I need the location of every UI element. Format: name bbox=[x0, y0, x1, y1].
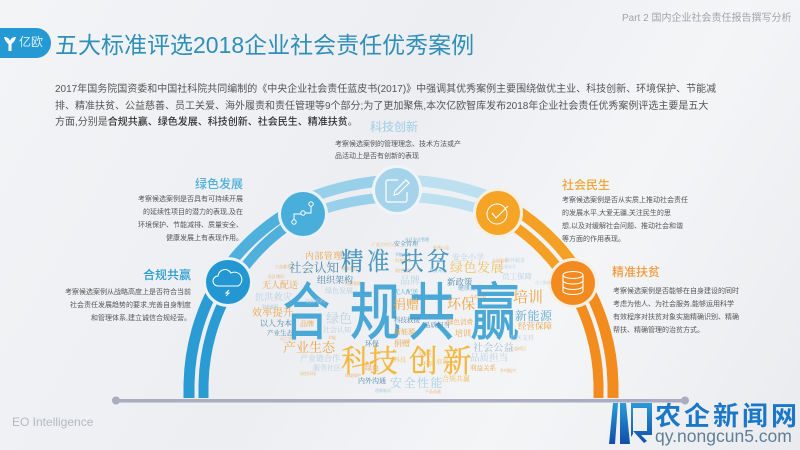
small dark blue words: 科技救援 bbox=[394, 315, 420, 324]
small light words bbox=[255, 252, 534, 373]
small dark blue words bbox=[260, 239, 473, 386]
tiny filler words: 社区安全管理 bbox=[405, 236, 429, 243]
small dark blue words: 以人为本 bbox=[260, 318, 292, 329]
heading: 精准扶贫 bbox=[612, 265, 660, 279]
words: 精准扶贫: 扶 bbox=[401, 242, 424, 277]
logo name: 亿欧 bbox=[19, 35, 43, 49]
small orange words: 效率提升 bbox=[252, 304, 293, 319]
small dark blue words: 组织架构 bbox=[317, 273, 353, 286]
description: 的延续性项目的潜力的表现,及在 bbox=[143, 209, 243, 216]
tiny filler words: 社区建设 bbox=[268, 273, 284, 280]
heading: 合规共赢 bbox=[143, 268, 191, 282]
description: 等方面的作用表现。 bbox=[562, 236, 625, 243]
words: 精准扶贫 bbox=[341, 242, 449, 277]
large words: 合规共赢 bbox=[283, 262, 519, 353]
arch segment: orange base bbox=[570, 278, 613, 398]
words: 科技创新: 创 bbox=[409, 337, 438, 381]
panel: 精准扶贫 bbox=[612, 265, 739, 334]
small light words: 社会认知 bbox=[323, 325, 351, 335]
description bbox=[335, 140, 461, 160]
tiny filler words: 扶贫开发 bbox=[430, 267, 446, 274]
small light words: 资源节约 bbox=[305, 298, 325, 305]
tiny filler words: 创新驱动 bbox=[375, 387, 391, 394]
tiny filler words: 内部管理 bbox=[345, 280, 361, 287]
description: 帮扶、精确管理的治贫方式。 bbox=[613, 327, 704, 334]
small blue words: 健康提升 bbox=[458, 283, 482, 292]
tiny filler words: 质量安全 bbox=[500, 263, 516, 270]
word cloud bbox=[252, 236, 553, 395]
description bbox=[562, 196, 688, 243]
small dark blue words: 安全管理 bbox=[394, 239, 418, 248]
small light words: 绿色 bbox=[326, 308, 352, 327]
small orange words: 培训 bbox=[513, 286, 543, 307]
small dark blue words: 新政策 bbox=[447, 276, 473, 288]
description: 品活动上是否有创新的表现 bbox=[335, 153, 419, 160]
small blue words: 安全性能 bbox=[390, 374, 444, 391]
arch segment: blue base bbox=[189, 278, 232, 398]
small blue words: 新能源 bbox=[515, 307, 553, 324]
small dark blue words: 内外沟通 bbox=[358, 376, 386, 386]
small light words: 员工保障 bbox=[502, 271, 532, 282]
intro paragraph: 方面,分别是合规共赢、绿色发展、科技创新、社会民生、精准扶贫。 bbox=[55, 117, 358, 128]
tiny filler words: 志愿服务 bbox=[492, 257, 508, 264]
words: 精准扶贫: 精 bbox=[341, 242, 363, 277]
watermark logo bbox=[609, 401, 800, 446]
tiny filler words: 绿色环保 bbox=[300, 370, 316, 377]
small light words: 品质担当 bbox=[470, 350, 508, 364]
words: 科技创新 bbox=[341, 337, 472, 381]
small orange words: 产业生态 bbox=[283, 337, 336, 356]
small orange words: 无人配送 bbox=[262, 278, 298, 291]
description: 考察候选案例是否具有可持续开展 bbox=[138, 196, 243, 203]
small orange words: 内部管理 bbox=[305, 249, 343, 262]
tiny filler words: 海外履责 bbox=[262, 303, 279, 310]
tiny filler words: 精准帮扶 bbox=[342, 265, 358, 272]
description: 考察候选案例是否从实质上推动社会责任 bbox=[562, 197, 688, 204]
small blue words: 无人配送 bbox=[394, 287, 418, 296]
icon: network node bbox=[278, 189, 328, 239]
small light words: 抗洪救灾 bbox=[255, 290, 292, 303]
small orange words: 品牌 bbox=[300, 319, 314, 329]
large words: 合规共赢: 合 bbox=[283, 262, 330, 352]
panel: 合规共赢 bbox=[65, 268, 191, 322]
watermark name: 农企新闻网 bbox=[655, 401, 800, 431]
tiny filler words: 慈善公益 bbox=[433, 244, 449, 251]
title: 五大标准评选2018企业社会责任优秀案例 bbox=[55, 32, 474, 58]
tiny filler words bbox=[262, 236, 551, 395]
logo badge bbox=[0, 28, 51, 58]
heading: 绿色发展 bbox=[195, 177, 243, 191]
words: 科技创新: 新 bbox=[443, 337, 472, 381]
large words: 合规共赢: 共 bbox=[408, 262, 455, 352]
small dark blue words: 社会认知 bbox=[289, 258, 339, 276]
small orange words: 环保 bbox=[447, 294, 475, 314]
tiny filler words: 科普教育 bbox=[395, 257, 411, 264]
small orange words: 新能源 bbox=[394, 327, 416, 337]
large words: 合规共赢: 赢 bbox=[470, 263, 519, 353]
tiny filler words: 节能减排 bbox=[395, 251, 411, 258]
description: 考察候选案例是否能够在自身建设的同时 bbox=[613, 288, 739, 295]
small orange words: 绿色消费 bbox=[447, 317, 474, 326]
icon: cloud node bbox=[203, 257, 253, 307]
intro paragraph: 2017年国务院国资委和中国社科院共同编制的《中央企业社会责任蓝皮书(2017)》中强调其优秀案例主要围绕做优主业、科技创新、环境保护、节能减 bbox=[55, 84, 716, 95]
tiny filler words: 公益项目 bbox=[510, 345, 526, 352]
small light words: 服务社区 bbox=[313, 363, 341, 373]
words: 科技创新: 科 bbox=[341, 337, 370, 381]
small orange words: 捐赠 bbox=[393, 294, 419, 313]
heading: 社会民生 bbox=[562, 178, 610, 192]
arch segment: amber bbox=[497, 203, 582, 285]
panel: 绿色发展 bbox=[138, 177, 243, 242]
small gold words: 环保 bbox=[421, 359, 433, 368]
small light words: 品牌 bbox=[400, 272, 420, 287]
tiny filler words: 责任管理 bbox=[395, 267, 411, 274]
small orange words: 经营保障 bbox=[518, 320, 553, 332]
icon: database node bbox=[548, 258, 598, 308]
intro paragraph: 排、精准扶贫、公益慈善、员工关爱、海外履责和责任管理等9个部分;为了更加聚焦,本次亿欧智库发布2018年企业社会责任优秀案例评选主要是五大 bbox=[55, 100, 708, 112]
tiny filler words: 产品质量 bbox=[425, 388, 441, 395]
words: 科技创新: 技 bbox=[369, 337, 398, 381]
arch segment: light blue bbox=[295, 180, 397, 217]
small orange words bbox=[252, 249, 553, 373]
icon: pencil note node bbox=[372, 165, 422, 215]
description: 考察候选案例的管理理念、技术方法或产 bbox=[335, 141, 461, 148]
tiny filler words: 产品创新 bbox=[470, 293, 486, 300]
tiny filler words: 员工健康 bbox=[535, 279, 551, 286]
small dark blue words: 品质担当 bbox=[424, 320, 450, 329]
small light words: 社会公益 bbox=[473, 339, 514, 354]
small gold words: 绿色发展 bbox=[450, 257, 504, 276]
header section label: Part 2 国内企业社会责任报告撰写分析 bbox=[622, 13, 791, 24]
description: 环境保护、节能减排、质量安全、 bbox=[138, 222, 243, 229]
small gold words: 合规共赢 bbox=[442, 374, 470, 384]
tiny filler words: 社会责任 bbox=[300, 301, 316, 308]
small orange words: 绿色 bbox=[365, 363, 379, 373]
small dark blue words: 产业生态 bbox=[267, 328, 294, 337]
small light words: 产业链合作 bbox=[300, 353, 340, 364]
arch segment: mid blue bbox=[220, 204, 303, 285]
tiny filler words: 环境保护 bbox=[345, 372, 361, 379]
description: 有效程序对扶贫对象实施精确识别、精确 bbox=[613, 314, 739, 321]
icon: check node bbox=[473, 188, 523, 238]
small light words: 海外履责 bbox=[505, 257, 526, 264]
description: 的发展水平,大爱无疆,关注民生的思 bbox=[562, 210, 671, 217]
words: 精准扶贫: 贫 bbox=[427, 242, 449, 277]
small light words: 绿色发展 bbox=[325, 286, 353, 296]
description: 和管理体系,建立诚信合规经营。 bbox=[91, 315, 191, 322]
small gold words bbox=[394, 257, 504, 384]
footer brand: EO Intelligence bbox=[12, 415, 93, 429]
large words: 合规共赢: 规 bbox=[350, 263, 401, 353]
tiny filler words: 广度合作行动 bbox=[372, 241, 396, 248]
description bbox=[65, 288, 191, 322]
small gold words: 科技 bbox=[394, 355, 406, 364]
small gold words: 培训 bbox=[436, 357, 448, 366]
small gold words: 品质 bbox=[418, 349, 432, 359]
small dark blue words: 环保 bbox=[365, 339, 379, 349]
icon: watermark mark bbox=[609, 403, 652, 444]
small blue words bbox=[390, 283, 553, 391]
tiny filler words: 合作共赢 bbox=[340, 251, 356, 258]
tiny filler words: 公益慈善 bbox=[275, 263, 291, 270]
small orange words: 利益关系 bbox=[470, 363, 496, 372]
icon: logo Y bbox=[4, 37, 16, 51]
tiny filler words: 乡村振兴 bbox=[500, 367, 517, 374]
description: 考虑为他人、为社会服务,能够运用科学 bbox=[613, 301, 734, 308]
arch segment: pale blue bbox=[397, 180, 504, 215]
description: 社会责任发展趋势的要求,完善自身制度 bbox=[70, 302, 191, 309]
watermark url: qy.nongcun5.com bbox=[655, 426, 792, 446]
description: 健康发展上有表现作用。 bbox=[166, 235, 243, 242]
panel: 社会民生 bbox=[562, 178, 688, 243]
heading: 科技创新 bbox=[370, 120, 418, 134]
description bbox=[138, 195, 243, 242]
description bbox=[613, 287, 739, 334]
description: 考察候选案例从战略高度上是否符合当前 bbox=[65, 289, 191, 296]
intro paragraph bbox=[55, 83, 716, 128]
small orange words: 培训 bbox=[455, 328, 471, 339]
small orange words: 捐赠 bbox=[394, 338, 410, 349]
small light words: 社区支持 bbox=[510, 333, 534, 342]
tiny filler words: 员工关爱 bbox=[280, 335, 296, 342]
description: 想,以及对缓解社会问题、推动社会和谐 bbox=[562, 223, 683, 230]
small light words: 安全小学 bbox=[452, 252, 484, 263]
baseline bbox=[112, 396, 689, 404]
words: 精准扶贫: 准 bbox=[367, 242, 389, 277]
tiny filler words: 节能 bbox=[328, 334, 336, 341]
panel: 科技创新 bbox=[335, 120, 461, 160]
